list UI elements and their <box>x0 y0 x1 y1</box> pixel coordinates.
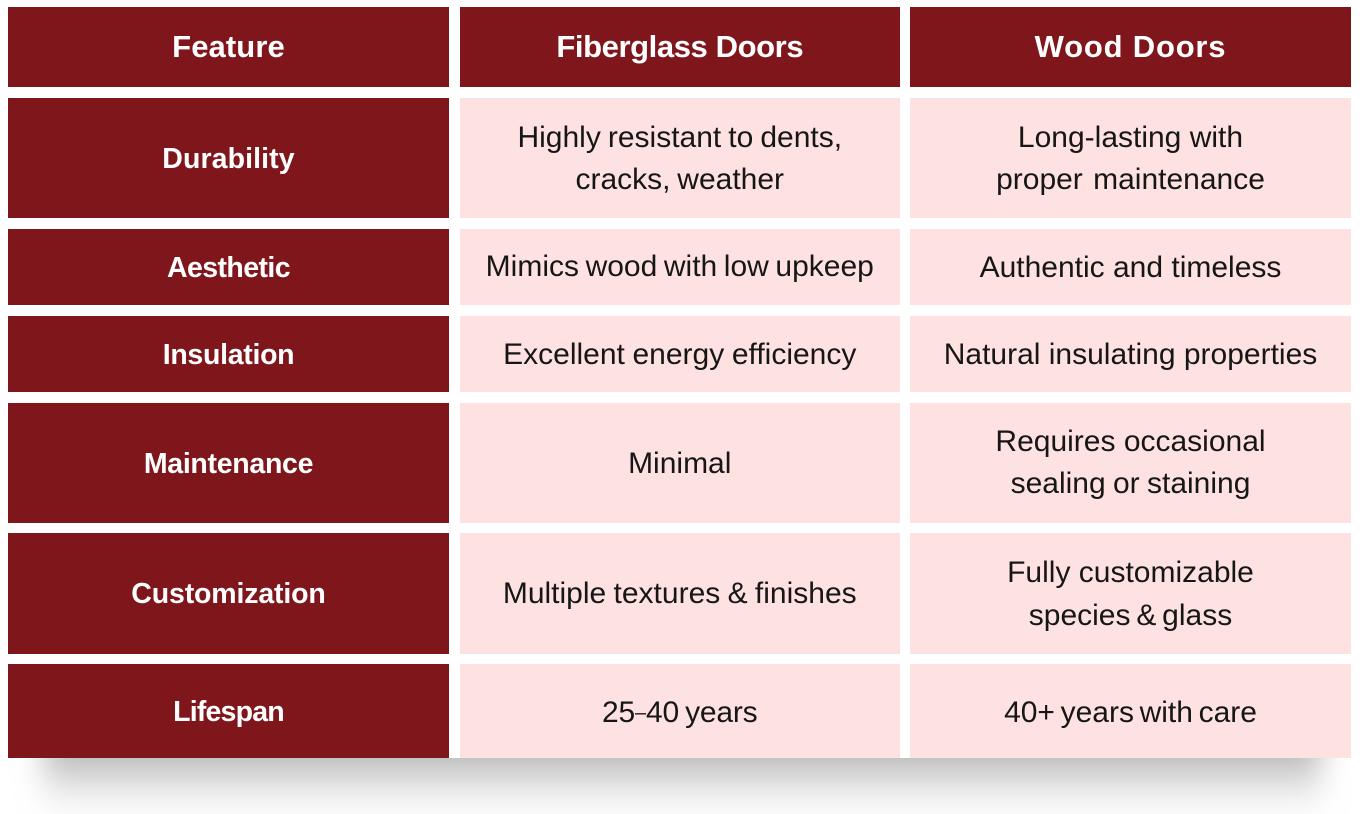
cell: wood lifespan <box>910 664 1351 758</box>
cell: wood insulation <box>910 316 1351 392</box>
row label: Aesthetic <box>8 229 449 305</box>
cell: wood customization: species & glass <box>1029 598 1232 632</box>
cell: wood durability: proper maintenance <box>996 163 1265 196</box>
row label: Durability: Durability <box>162 142 295 174</box>
cell: wood maintenance <box>910 403 1351 523</box>
cell: wood customization <box>910 533 1351 654</box>
cell: fiberglass aesthetic <box>460 229 900 305</box>
cell: fiberglass maintenance <box>460 403 900 523</box>
cell: fiberglass lifespan: 25 40 years <box>602 696 757 729</box>
cell: wood insulation: Natural insulating properties <box>944 338 1317 371</box>
row label: Customization <box>8 533 449 654</box>
row label: Maintenance <box>8 403 449 523</box>
cell: fiberglass customization: Multiple textures & finishes <box>503 577 857 610</box>
cell: fiberglass lifespan <box>460 664 900 758</box>
row label: Lifespan: Lifespan <box>173 696 284 728</box>
row label: Aesthetic: Aesthetic <box>167 252 290 284</box>
row label: Insulation <box>8 316 449 392</box>
cell: wood durability <box>910 98 1351 218</box>
cell: fiberglass maintenance: Minimal <box>628 447 731 480</box>
header: Feature: Feature <box>172 29 285 64</box>
row label: Customization: Customization <box>131 578 326 610</box>
cell: fiberglass durability: cracks, weather <box>575 163 784 196</box>
header: Wood Doors <box>910 7 1351 87</box>
cell: fiberglass lifespan: – <box>635 702 646 724</box>
cell: wood durability: Long-lasting with <box>1018 120 1243 154</box>
cell: wood customization: Fully customizable <box>1007 556 1254 589</box>
cell: wood maintenance: Requires occasional <box>995 424 1266 458</box>
cell: fiberglass aesthetic: Mimics wood with low upkeep <box>486 250 874 283</box>
cell: wood maintenance: sealing or staining <box>1011 467 1250 500</box>
row label: Maintenance: Maintenance <box>144 448 313 480</box>
row label: Insulation: Insulation <box>163 338 294 370</box>
row label: Durability <box>8 98 449 218</box>
cell: fiberglass durability: Highly resistant to dents, <box>517 120 842 154</box>
cell: fiberglass customization <box>460 533 900 654</box>
header: Wood Doors: Wood Doors <box>1035 29 1226 64</box>
cell: fiberglass insulation <box>460 316 900 392</box>
cell: wood lifespan: 40+ years with care <box>1004 696 1257 729</box>
drop shadow under table <box>28 758 1336 808</box>
row label: Lifespan <box>8 664 449 758</box>
header: Feature <box>8 7 449 87</box>
cell: wood aesthetic: Authentic and timeless <box>980 251 1281 284</box>
cell: wood aesthetic <box>910 229 1351 305</box>
header: Fiberglass Doors: Fiberglass Doors <box>556 29 803 64</box>
cell: fiberglass durability <box>460 98 900 218</box>
header: Fiberglass Doors <box>460 7 900 87</box>
cell: fiberglass insulation: Excellent energy efficiency <box>503 338 856 371</box>
